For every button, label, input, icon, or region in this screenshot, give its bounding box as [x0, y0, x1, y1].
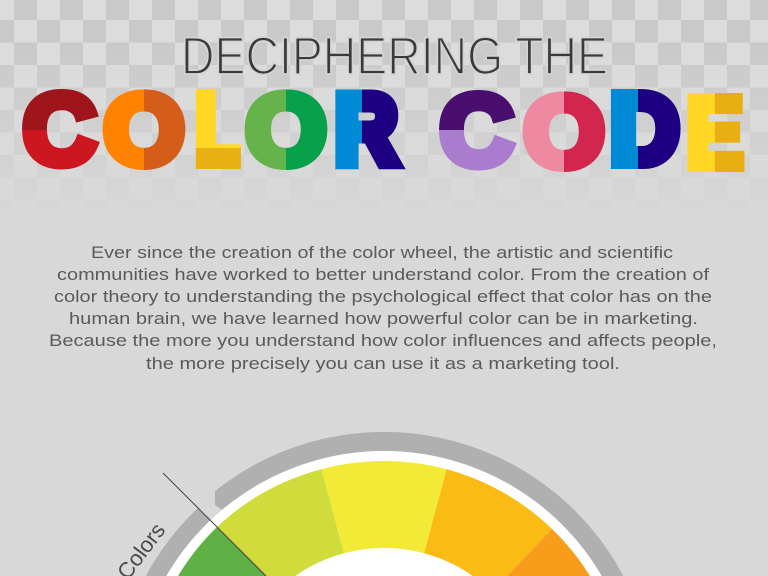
divider line between warm and cool colors: [163, 473, 266, 576]
color wheel: [112, 432, 623, 576]
segment: yellow: [321, 461, 447, 553]
intro paragraph: Because the more you understand how color influences and affects people,: [49, 331, 717, 350]
letter E yellow: E: [686, 77, 744, 189]
letter O pink: O: [524, 76, 604, 186]
segment: orange: [507, 529, 590, 576]
segment: yellow green: [217, 469, 344, 576]
letter C purple: C: [440, 74, 513, 186]
intro paragraph: [49, 243, 717, 373]
intro paragraph: the more precisely you can use it as a marketing tool.: [146, 354, 620, 373]
letter O orange: O: [104, 74, 184, 184]
letter D blue: D: [610, 74, 679, 184]
letter R blue: R: [335, 74, 398, 184]
warm colors grey arc: [215, 432, 623, 576]
letter C red: C: [23, 74, 96, 184]
segment: green: [178, 527, 266, 576]
white ring and hub: [166, 451, 602, 576]
intro paragraph: communities have worked to better understand color. From the creation of: [57, 265, 709, 284]
title: color code: [23, 74, 744, 189]
intro paragraph: color theory to understanding the psychological effect that color has on the: [54, 287, 712, 306]
letter O green: O: [246, 74, 326, 184]
intro paragraph: human brain, we have learned how powerful color can be in marketing.: [69, 309, 698, 328]
cool colors grey arc: [146, 508, 214, 576]
title: deciphering the: DECIPHERING THE: [181, 27, 608, 86]
intro paragraph: Ever since the creation of the color wheel, the artistic and scientific: [91, 243, 674, 262]
segment: yellow orange: [424, 469, 552, 576]
letter L yellow: L: [196, 76, 238, 183]
